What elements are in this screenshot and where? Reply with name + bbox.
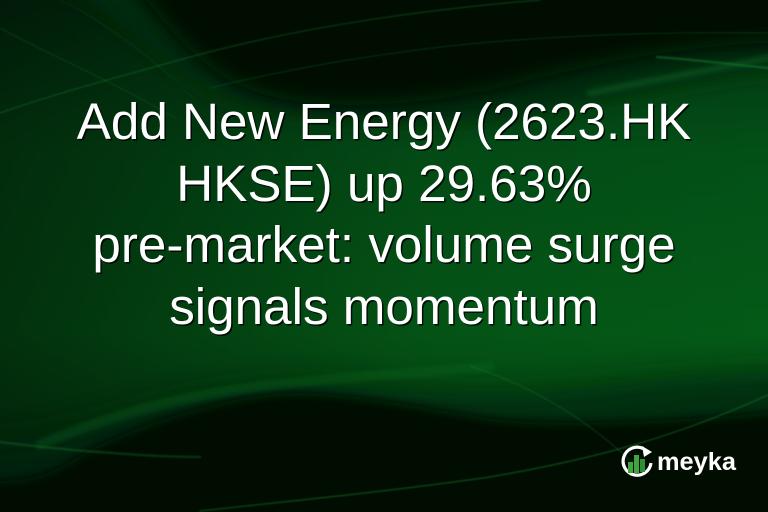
icon: circular arrow with bars — [623, 446, 652, 475]
bottom dark hill — [0, 370, 768, 512]
logo: meyka — [621, 446, 737, 477]
title: HKSE) up 29.63% — [176, 155, 592, 212]
title — [76, 93, 692, 336]
top dark bowl — [0, 0, 768, 122]
wordmark: meyka — [657, 448, 737, 476]
title: Add New Energy (2623.HK — [77, 93, 691, 150]
title: pre-market: volume surge — [92, 216, 676, 273]
title: signals momentum — [169, 278, 599, 335]
